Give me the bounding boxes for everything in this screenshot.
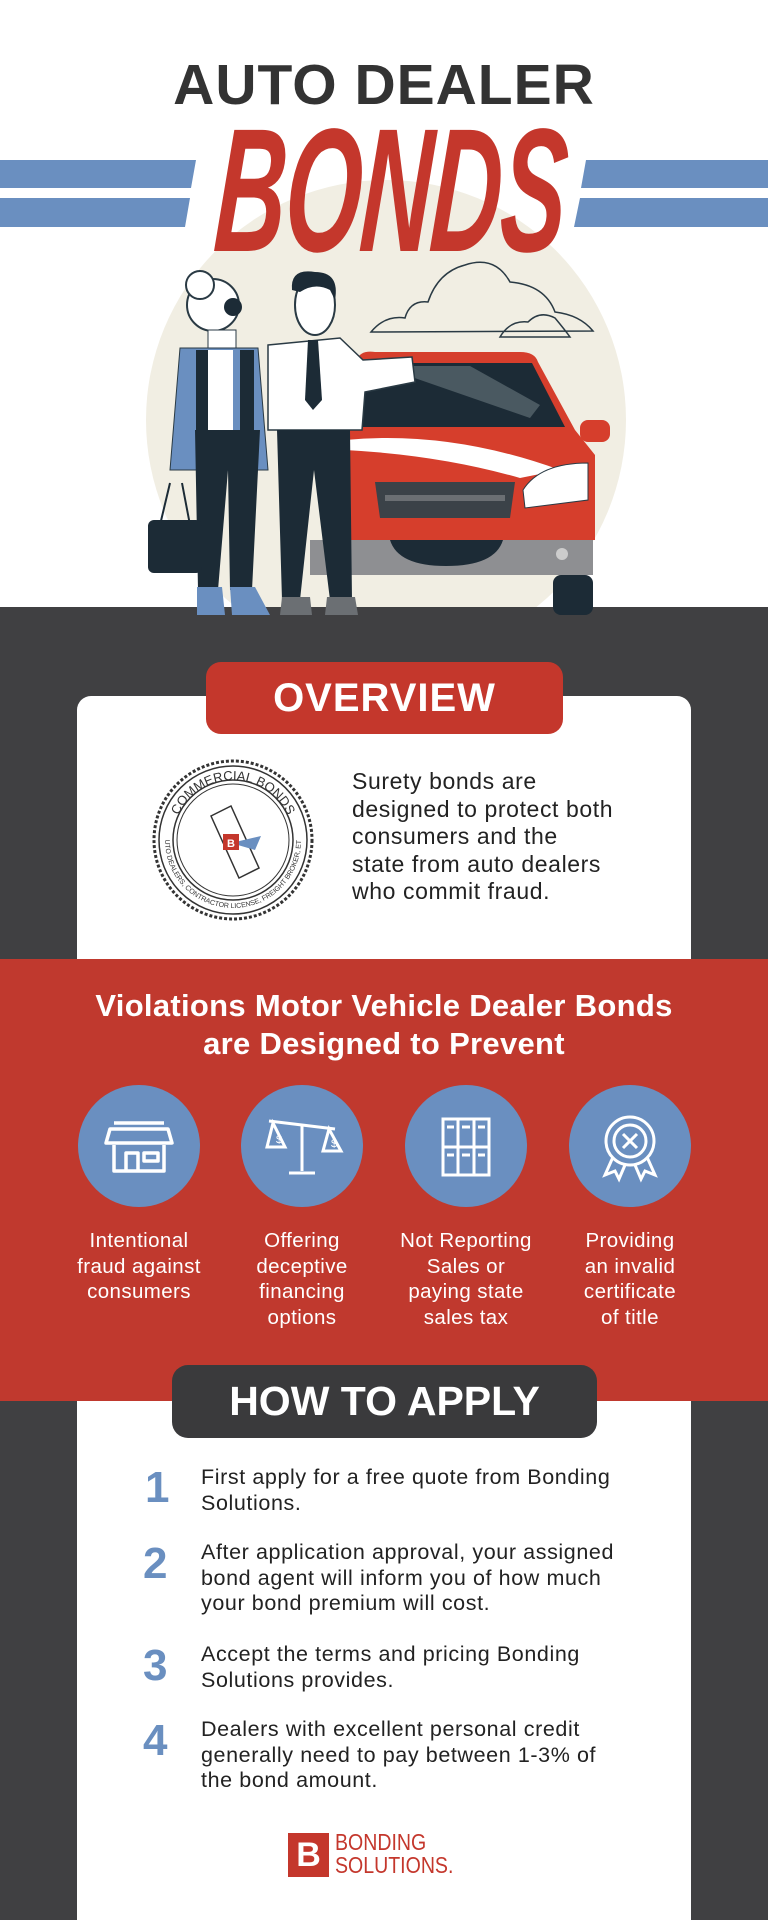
panel: violations: sales tax xyxy=(424,1306,508,1328)
steps: 2 xyxy=(143,1539,168,1588)
illustration xyxy=(0,160,768,615)
panel: violations: paying state xyxy=(408,1280,524,1303)
text: overview: designed to protect both xyxy=(352,796,613,822)
steps: the bond amount. xyxy=(201,1768,378,1792)
title: auto dealer: AUTO DEALER xyxy=(173,53,595,117)
panel: how to apply xyxy=(77,1401,691,1920)
panel: violations: financing xyxy=(259,1280,345,1303)
steps: bond agent will inform you of how much xyxy=(201,1566,601,1590)
logo: B xyxy=(296,1836,321,1874)
icon: scale: $ xyxy=(331,1138,337,1150)
icon: store xyxy=(78,1085,200,1207)
steps: generally need to pay between 1-3% of xyxy=(201,1742,596,1766)
panel: violations: fraud against xyxy=(77,1254,201,1278)
steps: 1 xyxy=(145,1463,170,1512)
steps: Dealers with excellent personal credit xyxy=(201,1717,580,1741)
man xyxy=(268,271,415,615)
panel: violations xyxy=(0,959,768,1401)
text: overview: state from auto dealers xyxy=(352,850,601,876)
steps: 4 xyxy=(143,1716,168,1765)
beige circle xyxy=(146,180,626,607)
panel: overview xyxy=(77,696,691,959)
icon: commercial bonds seal: B xyxy=(227,838,235,850)
icon: scale: $ xyxy=(276,1134,282,1146)
dark background xyxy=(0,607,768,1920)
cloud xyxy=(371,262,593,337)
panel: violations: of title xyxy=(601,1306,659,1328)
logo: BONDING xyxy=(335,1829,426,1855)
stripes xyxy=(0,160,196,227)
text: overview xyxy=(352,768,613,904)
panel: violations: Providing xyxy=(585,1229,675,1252)
heading: overview xyxy=(206,662,563,734)
steps: After application approval, your assigned xyxy=(201,1540,614,1564)
panel: violations: Intentional xyxy=(89,1229,188,1252)
panel: violations: certificate xyxy=(584,1280,676,1303)
heading: violations: Violations Motor Vehicle Dealer Bonds xyxy=(95,988,673,1023)
panel: violations: options xyxy=(268,1306,336,1328)
panel: violations: an invalid xyxy=(585,1254,675,1278)
panel: violations: consumers xyxy=(87,1280,191,1303)
heading: overview: OVERVIEW xyxy=(273,676,496,720)
heading: violations: are Designed to Prevent xyxy=(203,1026,565,1061)
icon: invalid certificate xyxy=(569,1085,691,1207)
woman xyxy=(148,271,270,615)
labels: violations xyxy=(77,1229,676,1328)
heading: violations xyxy=(95,988,673,1061)
panel: violations: deceptive xyxy=(256,1254,348,1278)
title: bonds: BONDS xyxy=(210,93,572,289)
icon: scale xyxy=(241,1085,363,1207)
panel: violations: Sales or xyxy=(427,1254,505,1278)
steps: your bond premium will cost. xyxy=(201,1591,490,1615)
steps: Solutions. xyxy=(201,1490,301,1514)
text: overview: who commit fraud. xyxy=(352,878,550,904)
text: overview: consumers and the xyxy=(352,823,558,849)
text: overview: Surety bonds are xyxy=(352,768,537,794)
steps: First apply for a free quote from Bonding xyxy=(201,1465,610,1489)
panel: violations: Not Reporting xyxy=(400,1229,532,1252)
steps: Accept the terms and pricing Bonding xyxy=(201,1642,580,1666)
steps xyxy=(143,1463,614,1792)
panel: violations: Offering xyxy=(264,1229,340,1252)
steps: 3 xyxy=(143,1641,168,1690)
icon: commercial bonds seal: COMMERCIAL BONDS xyxy=(172,771,294,814)
heading: how to apply: HOW TO APPLY xyxy=(229,1378,540,1424)
steps: Solutions provides. xyxy=(201,1668,394,1692)
heading: how to apply xyxy=(172,1365,597,1438)
logo xyxy=(288,1829,453,1878)
icon: ledger xyxy=(405,1085,527,1207)
logo: SOLUTIONS. xyxy=(335,1852,453,1878)
car xyxy=(310,352,610,615)
